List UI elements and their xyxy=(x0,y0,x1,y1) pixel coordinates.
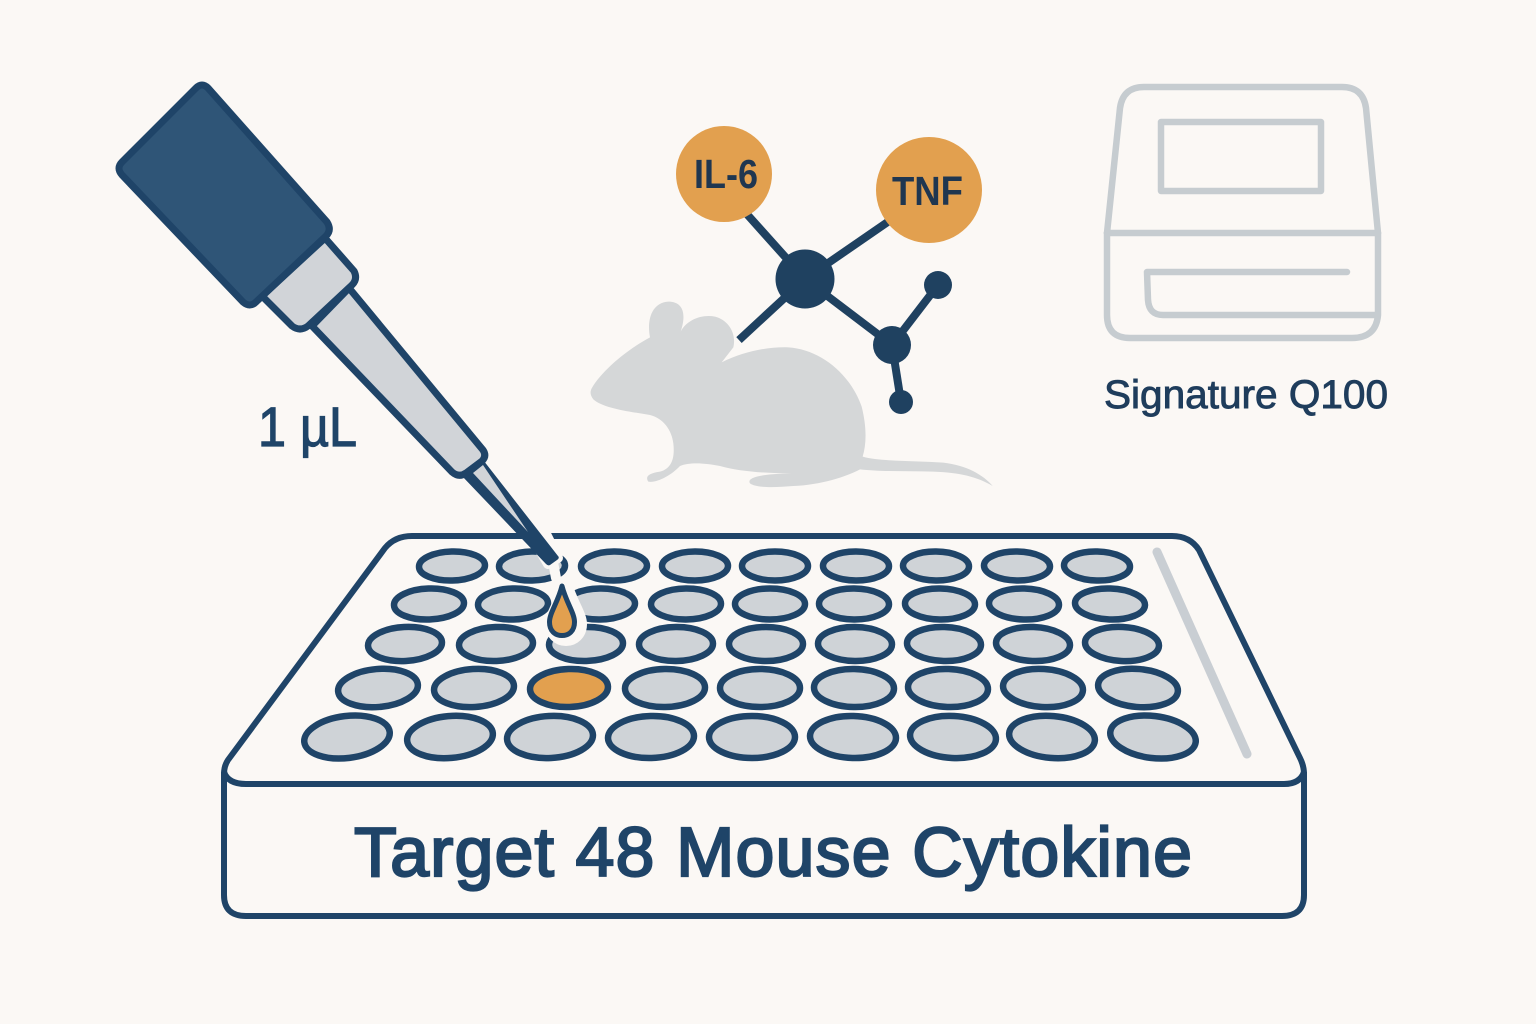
pipette body xyxy=(119,85,329,305)
volume label: 1 µL xyxy=(258,395,357,458)
TNF node xyxy=(876,137,982,243)
halo around pipette tip and droplet xyxy=(527,522,581,640)
plate label: Target 48 Mouse Cytokine xyxy=(354,813,1192,891)
molecule network xyxy=(676,126,982,414)
TNF node: TNF xyxy=(892,168,963,214)
pipette collar xyxy=(262,238,356,329)
pipette shaft xyxy=(312,288,485,475)
pipette fine tip xyxy=(462,456,559,565)
instrument: Signature Q100 xyxy=(1107,87,1378,338)
pipette xyxy=(119,85,581,640)
molecule nodes xyxy=(776,250,952,414)
well plate xyxy=(224,536,1304,916)
plate side strip xyxy=(1157,552,1247,754)
plate outline xyxy=(224,536,1304,916)
filled orange well xyxy=(529,668,609,708)
molecule bonds xyxy=(739,212,938,402)
instrument label: Signature Q100 xyxy=(1104,373,1388,417)
IL-6 node xyxy=(676,126,772,222)
mouse silhouette xyxy=(591,302,993,487)
droplet xyxy=(550,586,574,636)
IL-6 node: IL-6 xyxy=(694,151,758,197)
wells xyxy=(302,551,1198,763)
